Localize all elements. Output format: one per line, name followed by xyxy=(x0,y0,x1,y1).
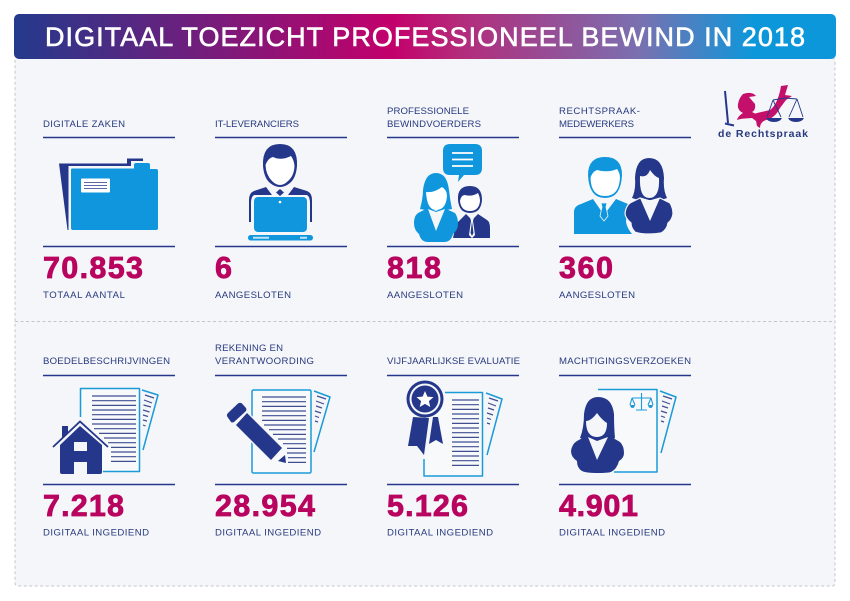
caption: digitaal ingediend: DIGITAAL INGEDIEND xyxy=(387,528,493,538)
title banner: DIGITAAL TOEZICHT PROFESSIONEEL BEWIND IN 2018 xyxy=(45,22,805,52)
heading: digitale zaken: DIGITALE ZAKEN xyxy=(43,119,125,130)
icon: folder xyxy=(59,158,158,230)
caption: aangesloten: AANGESLOTEN xyxy=(387,290,463,301)
column: professionele bewindvoerders: BEWINDVOERDERS xyxy=(387,119,481,130)
heading: machtigingsverzoeken: MACHTIGINGSVERZOEKEN xyxy=(559,356,691,367)
caption: digitaal ingediend: DIGITAAL INGEDIEND xyxy=(43,528,149,538)
figure: 6: 6 xyxy=(215,251,232,285)
figure: 70.853: 70.853 xyxy=(43,251,143,285)
caption: digitaal ingediend: DIGITAAL INGEDIEND xyxy=(215,528,321,538)
column: boedelbeschrijvingen xyxy=(43,356,175,538)
column: professionele bewindvoerders xyxy=(387,106,519,301)
caption: totaal aantal: TOTAAL AANTAL xyxy=(43,290,126,301)
icon: person with laptop xyxy=(248,144,313,240)
heading: rekening en verantwoording: REKENING EN xyxy=(215,343,283,354)
icon: award ribbon with document xyxy=(406,380,502,476)
icon: two advisors with speech bubble xyxy=(414,144,490,242)
column: rechtspraak-medewerkers xyxy=(559,106,691,301)
figure: 360: 360 xyxy=(559,251,613,285)
logo: de Rechtspraak: de Rechtspraak xyxy=(718,128,808,140)
figure: 818: 818 xyxy=(387,251,441,285)
column: rechtspraak-medewerkers: MEDEWERKERS xyxy=(559,119,634,130)
column: digitale zaken xyxy=(43,119,175,301)
column: rekening en verantwoording xyxy=(215,343,347,538)
column: IT-leveranciers xyxy=(215,119,347,301)
icon: pencil with document xyxy=(227,390,330,473)
figure: 5.126: 5.126 xyxy=(387,489,468,523)
figure: 4.901: 4.901 xyxy=(559,489,638,523)
heading: IT-leveranciers: IT-LEVERANCIERS xyxy=(215,119,299,130)
icon: judge with document and scales xyxy=(571,390,676,473)
column: machtigingsverzoeken xyxy=(559,356,691,538)
logo: de Rechtspraak xyxy=(718,85,808,140)
caption: aangesloten: AANGESLOTEN xyxy=(215,290,291,301)
figure: 7.218: 7.218 xyxy=(43,489,124,523)
icon: house with document xyxy=(53,388,158,474)
column: vijfjaarlijkse evaluatie xyxy=(387,356,520,538)
icon: two staff members xyxy=(574,157,673,234)
heading: rechtspraak-medewerkers: RECHTSPRAAK- xyxy=(559,106,640,117)
caption: digitaal ingediend: DIGITAAL INGEDIEND xyxy=(559,528,665,538)
heading: boedelbeschrijvingen: BOEDELBESCHRIJVINGEN xyxy=(43,356,170,367)
column: rekening en verantwoording: VERANTWOORDING xyxy=(215,356,314,367)
figure: 28.954: 28.954 xyxy=(215,489,315,523)
icon: scales on document xyxy=(630,393,653,410)
caption: aangesloten: AANGESLOTEN xyxy=(559,290,635,301)
heading: professionele bewindvoerders: PROFESSIONELE xyxy=(387,106,469,117)
heading: vijfjaarlijkse evaluatie: VIJFJAARLIJKSE EVALUATIE xyxy=(387,356,520,367)
title banner xyxy=(14,14,836,59)
